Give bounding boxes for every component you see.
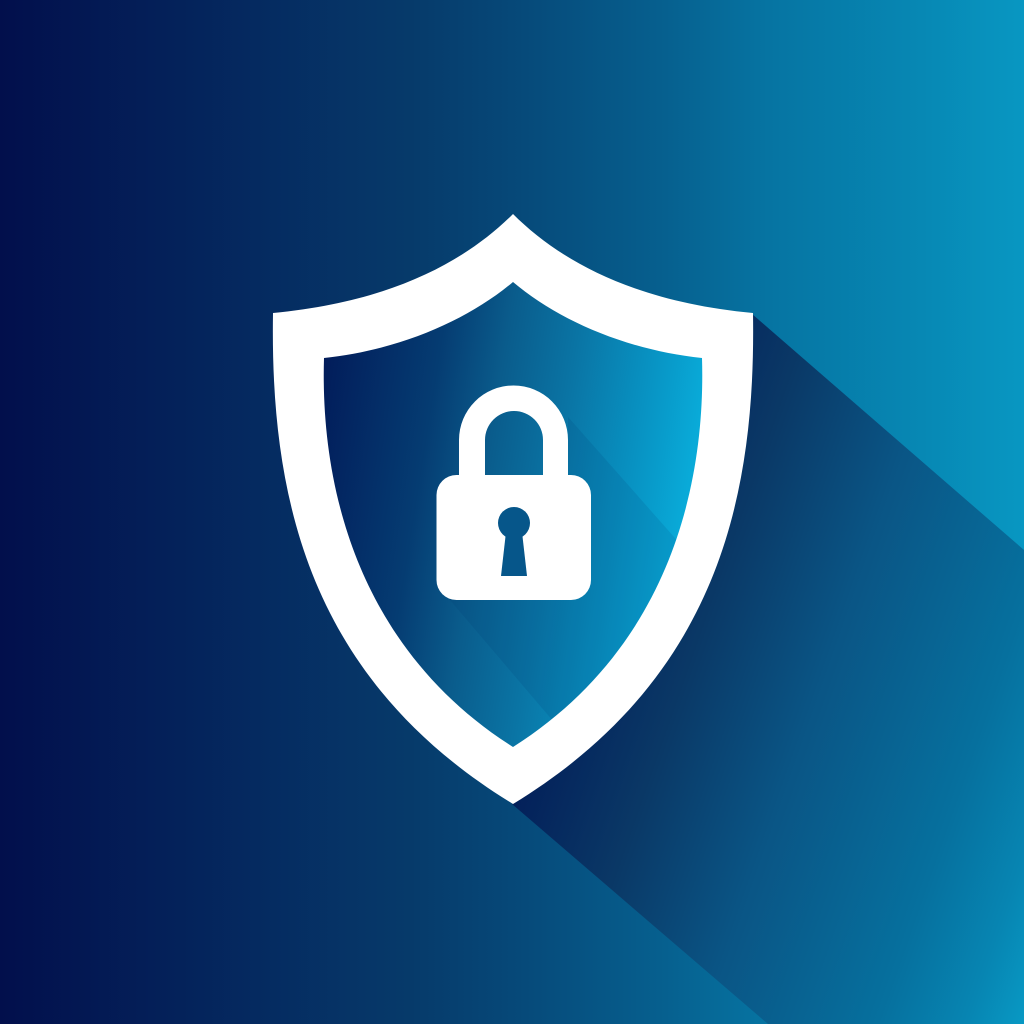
shield: [273, 214, 753, 804]
padlock shackle: [459, 385, 568, 480]
padlock icon: [436, 385, 591, 600]
long drop shadow: [512, 314, 1024, 1024]
padlock body: [436, 475, 591, 600]
padlock shadow inside shield: [520, 418, 676, 719]
keyhole: [498, 507, 530, 576]
shield inner panel: [324, 282, 702, 747]
shield outer white frame: [273, 214, 753, 804]
